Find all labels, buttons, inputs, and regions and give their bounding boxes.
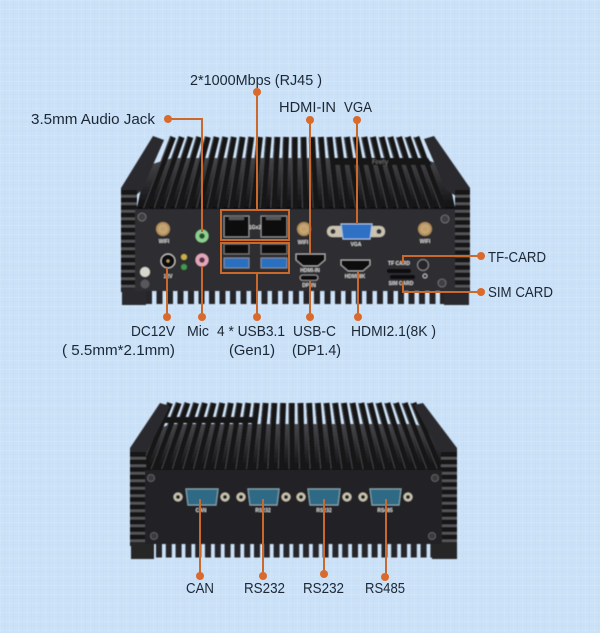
- logo strip: [160, 417, 258, 423]
- card slots: SIM CARD: [389, 281, 414, 287]
- hdmi-in port: [296, 254, 325, 274]
- hdmi 8k port: HDMI 8K: [345, 274, 366, 280]
- hdmi-in port: HDMI-IN: [300, 268, 320, 274]
- hdmi 8k port: [341, 260, 370, 280]
- left chamfer: [121, 136, 164, 196]
- rj45 ports: 1Gx2: [249, 225, 261, 231]
- usb-c port: DP-IN: [302, 283, 316, 289]
- card slots: [387, 260, 428, 287]
- callout: rj45: 2*1000Mbps (RJ45 ): [190, 73, 322, 89]
- callout: rs232 one: RS232: [244, 581, 285, 597]
- callout: hdmi 2.1: HDMI2.1(8K ): [351, 324, 436, 340]
- rj45 ports: [224, 216, 287, 237]
- callout: usb 3.1: 4 * USB3.1: [217, 324, 285, 340]
- wifi antenna left: WIFI: [159, 239, 170, 245]
- wifi antenna left: [156, 222, 170, 245]
- wifi antenna right: [418, 222, 432, 245]
- callout: sim card: SIM CARD: [488, 285, 553, 301]
- audio jack green: [196, 230, 208, 242]
- ground screw: [140, 267, 150, 288]
- usb-c port: [300, 275, 318, 289]
- callout: vga: VGA: [344, 100, 372, 116]
- device: top unit, front I/O panel: Firefly: [372, 160, 388, 166]
- callout: tf-card: TF-CARD: [488, 250, 546, 266]
- db9 rs485: [358, 489, 412, 514]
- bottom fins: [156, 542, 432, 558]
- callout: usb 3.1: (Gen1): [229, 343, 275, 359]
- callout: usb-c: (DP1.4): [292, 343, 341, 359]
- heatsink body: [136, 158, 456, 212]
- device: top unit, front I/O panel: [121, 136, 470, 305]
- wifi antenna right: WIFI: [420, 239, 431, 245]
- left chamfer: [130, 403, 170, 456]
- callout: dc12v: DC12V: [131, 324, 175, 340]
- callout: rs485: [365, 499, 405, 597]
- callout: hdmi-in: [279, 100, 336, 254]
- side fins: [121, 190, 470, 292]
- callout: can: CAN: [186, 581, 214, 597]
- callout: can: [186, 499, 214, 597]
- callout: usb-c: USB-C: [293, 324, 336, 340]
- card slots: TF CARD: [388, 261, 410, 267]
- power jack: 12V: [164, 274, 173, 280]
- callout: mic: [187, 266, 209, 340]
- top fins: [140, 403, 440, 469]
- db9 rs232 one: RS232: [255, 508, 271, 514]
- callout: rs232 two: [303, 499, 344, 597]
- callout: rs232 two: RS232: [303, 581, 344, 597]
- callout: tf-card: [403, 250, 546, 266]
- right chamfer: [424, 136, 470, 196]
- usb ports: [224, 244, 287, 268]
- front panel: [135, 209, 455, 291]
- right chamfer: [414, 403, 457, 456]
- panel screws: [138, 213, 449, 287]
- callout: vga: [344, 100, 372, 224]
- status leds: [181, 254, 187, 270]
- db9 can: [174, 489, 230, 514]
- callout: 3.5mm audio jack: [31, 112, 202, 232]
- heatsink body: [140, 424, 446, 474]
- callout: usb 3.1: [217, 243, 289, 359]
- db9 rs232 two: RS232: [316, 508, 332, 514]
- db9 rs485: RS485: [377, 508, 393, 514]
- bottom fins: [146, 290, 446, 304]
- logo strip: [332, 158, 432, 165]
- callout: dc12v: ( 5.5mm*2.1mm): [62, 343, 175, 359]
- rear panel: [145, 470, 442, 544]
- callout: hdmi-in: HDMI-IN: [279, 100, 336, 116]
- top fins: [144, 137, 443, 208]
- side fins: [130, 452, 457, 546]
- callout: rs232 one: [244, 499, 285, 597]
- right foot: [432, 542, 457, 559]
- power jack: [161, 254, 175, 280]
- db9 rs232 two: [296, 489, 352, 514]
- db9 rs232 one: [236, 489, 290, 514]
- callout: mic: Mic: [187, 324, 209, 340]
- callout: usb-c: [292, 281, 341, 359]
- callout: rs485: RS485: [365, 581, 405, 597]
- callout: hdmi 2.1: [351, 271, 436, 340]
- callout: rj45: [190, 73, 322, 240]
- db9 can: CAN: [196, 508, 207, 514]
- callout: 3.5mm audio jack: 3.5mm Audio Jack: [31, 112, 156, 128]
- wifi antenna middle: [297, 222, 311, 246]
- panel screws: [148, 474, 438, 540]
- device: bottom unit, serial panel: [130, 403, 457, 559]
- wifi antenna middle: WIFI: [298, 240, 309, 246]
- vga port: [327, 224, 385, 248]
- vga port: VGA: [351, 242, 362, 248]
- callout: sim card: [403, 282, 553, 301]
- feet: [122, 288, 146, 305]
- right foot: [444, 288, 469, 305]
- feet: [131, 542, 154, 559]
- callout: dc12v: [62, 268, 175, 359]
- mic jack pink: [196, 254, 208, 266]
